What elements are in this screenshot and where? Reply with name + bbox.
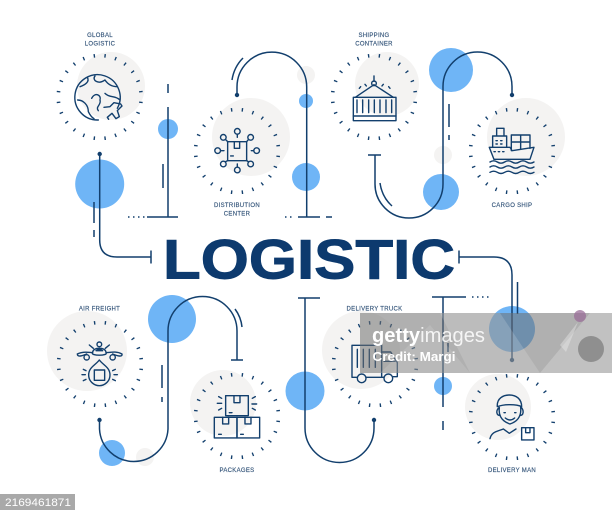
heading: shipping container: CONTAINER bbox=[355, 42, 393, 48]
icon: globe with plane bbox=[75, 75, 122, 120]
heading: cargo ship: CARGO SHIP bbox=[492, 203, 532, 209]
heading: shipping container: SHIPPING bbox=[358, 33, 390, 39]
heading: global logistic: GLOBAL bbox=[87, 33, 113, 39]
heading: air freight: AIR FREIGHT bbox=[79, 306, 120, 312]
panel: cargo ship bbox=[470, 98, 565, 209]
connector: title to delivery man bbox=[459, 250, 535, 362]
icon: stacked packages bbox=[214, 396, 260, 438]
panel: distribution center bbox=[196, 98, 290, 218]
watermark band bbox=[360, 310, 612, 373]
icon: air freight plane with parcel bbox=[77, 342, 122, 386]
icon: delivery truck bbox=[352, 345, 397, 383]
connector: vertical T left bbox=[128, 84, 178, 217]
icon: delivery man with parcel bbox=[490, 395, 534, 440]
icon: cargo ship bbox=[489, 128, 534, 173]
watermark credit: Credit: Margi bbox=[372, 349, 456, 364]
panel: packages bbox=[190, 370, 278, 474]
connector: delivery truck arc bbox=[286, 298, 376, 462]
heading: distribution center: CENTER bbox=[224, 212, 251, 218]
panel: delivery truck bbox=[322, 306, 416, 406]
icon: distribution network box bbox=[215, 128, 259, 173]
icon: shipping container bbox=[353, 76, 396, 121]
panel: shipping container bbox=[332, 33, 419, 138]
connector: vertical T right bbox=[432, 297, 492, 430]
heading: global logistic: LOGISTIC bbox=[85, 42, 116, 48]
watermark logo text: gettyimages bbox=[372, 324, 485, 347]
panel: air freight bbox=[47, 306, 142, 406]
heading: distribution center: DISTRIBUTION bbox=[214, 203, 260, 209]
heading: packages: PACKAGES bbox=[220, 468, 254, 474]
connector: air freight to packages bbox=[97, 295, 243, 466]
image id tag: 2169461871 bbox=[5, 497, 71, 509]
heading: delivery truck: DELIVERY TRUCK bbox=[347, 306, 402, 312]
image id tag bbox=[0, 494, 75, 510]
panel: global logistic bbox=[58, 33, 145, 138]
panel: delivery man bbox=[465, 374, 554, 474]
connector: shipping container to cargo ship bbox=[368, 48, 514, 218]
title: LOGISTIC bbox=[163, 228, 455, 290]
heading: delivery man: DELIVERY MAN bbox=[488, 468, 536, 474]
connector: global logistic to title bbox=[75, 152, 151, 264]
connector: distribution center arc bbox=[232, 52, 332, 217]
